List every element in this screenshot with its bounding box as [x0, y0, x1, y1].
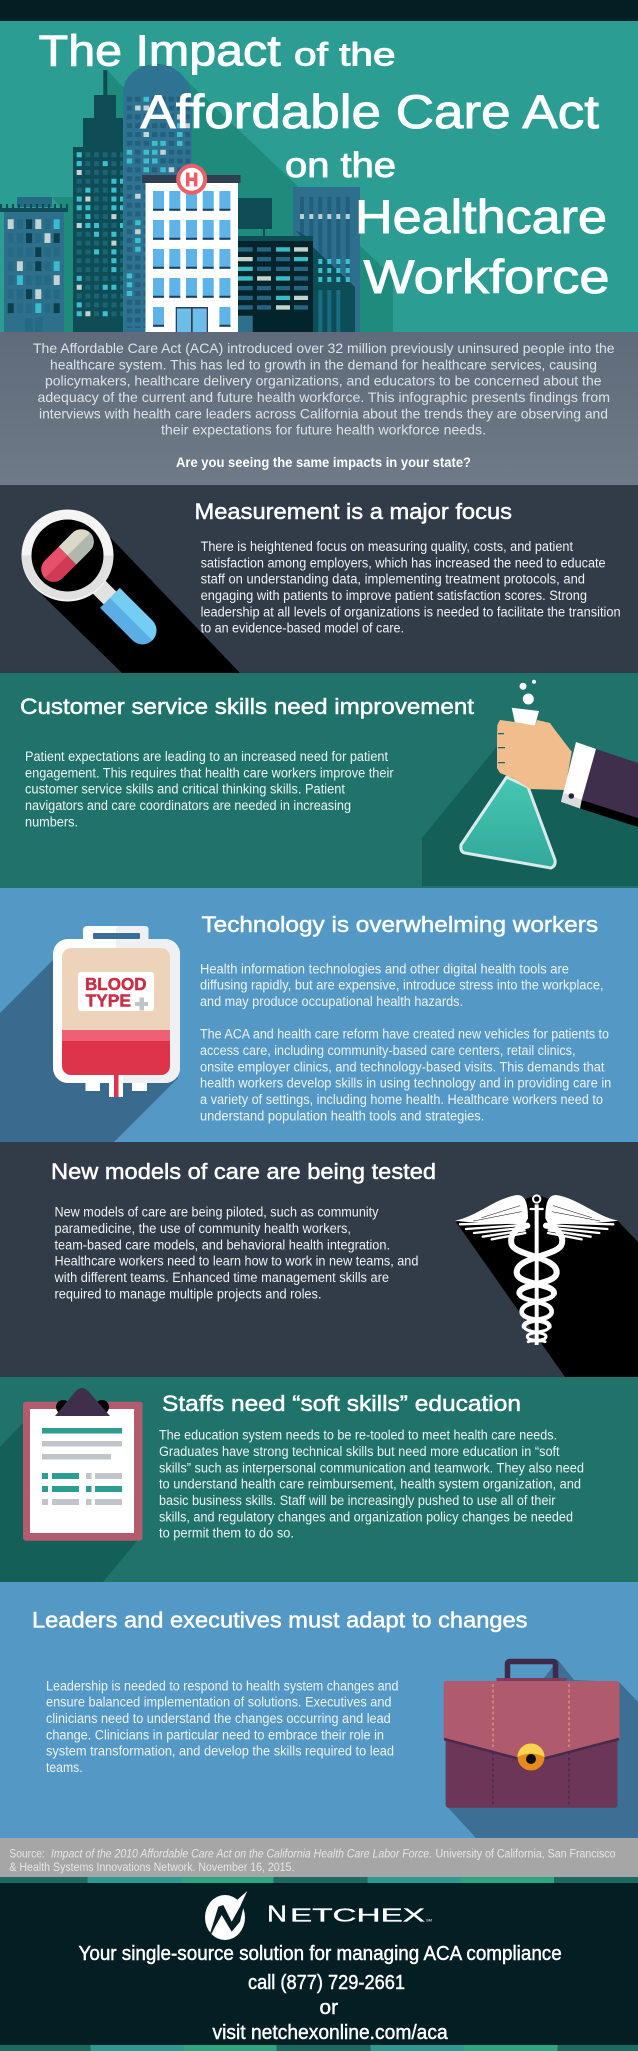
body text: ensure balanced implementation of solutions. Executives and [46, 1695, 392, 1710]
body text: skills, and regulatory changes and organization policy changes be needed [159, 1509, 573, 1524]
body text: system transformation, and develop the skills required to lead [46, 1744, 394, 1759]
source note: & Health Systems Innovations Network. November 16, 2015. [9, 1860, 294, 1874]
intro text: policymakers, healthcare delivery organizations, and educators to be concerned about the [45, 373, 602, 389]
icon: caduceus [455, 1195, 638, 1377]
blue tower [123, 64, 192, 332]
icon: blood bag [0, 926, 180, 1142]
panel: technology [0, 888, 638, 1142]
body text: Leadership is needed to respond to health system changes and [46, 1678, 398, 1693]
body text [159, 1428, 584, 1541]
city skyline illustration [0, 64, 393, 332]
panel: new models [0, 1142, 638, 1377]
body text [25, 749, 394, 829]
body text: The education system needs to be re-tooled to meet health care needs. [159, 1428, 557, 1443]
bag label: BLOOD [85, 974, 146, 994]
body text: and may produce occupational health hazards. [200, 994, 463, 1009]
title: of the [294, 37, 396, 73]
body text: The ACA and health care reform have created new vehicles for patients to [200, 1027, 609, 1042]
panel: intro [0, 332, 638, 485]
bag label: TYPE [86, 990, 131, 1010]
body text [200, 961, 611, 1123]
right tower [293, 187, 360, 332]
tagline: Your single-source solution for managing ACA compliance [78, 1943, 562, 1965]
body text: to an evidence-based model of care. [201, 621, 404, 636]
logo: Netchex: SM [426, 1918, 432, 1923]
body text: navigators and care coordinators are needed in increasing [25, 798, 351, 813]
body text: required to manage multiple projects and roles. [54, 1286, 322, 1301]
heading: Leaders and executives must adapt to changes [32, 1608, 528, 1633]
panel: customer service [0, 673, 638, 888]
body text: Patient expectations are leading to an increased need for patient [25, 749, 388, 764]
body text: engagement. This requires that health care workers improve their [25, 765, 394, 780]
body text: team-based care models, and behavioral health integration. [54, 1237, 390, 1252]
left building [0, 197, 68, 332]
top dark band [0, 0, 638, 21]
body text: onsite employer clinics, and technology-based visits. This demands that [200, 1059, 605, 1074]
body text: teams. [46, 1760, 83, 1775]
body text: to permit them to do so. [159, 1526, 294, 1541]
heading: Customer service skills need improvement [20, 694, 475, 719]
title: Healthcare [355, 190, 607, 243]
intro text: adequacy of the current and future health workforce. This infographic presents findings from [38, 389, 610, 405]
panel: leaders [0, 1582, 638, 1838]
body text [54, 1205, 418, 1301]
source note: Source: [9, 1846, 45, 1860]
source note: Impact of the 2010 Affordable Care Act on the California Health Care Labor Force. [51, 1846, 432, 1860]
title: The Impact [39, 27, 281, 76]
body text: Graduates have strong technical skills but need more education in “soft [159, 1444, 560, 1459]
hospital H sign [176, 164, 207, 195]
intro question: Are you seeing the same impacts in your state? [176, 454, 471, 470]
body text: health workers develop skills in using technology and in providing care in [200, 1076, 611, 1091]
panel: measurement [0, 485, 638, 673]
hospital door [176, 307, 208, 332]
website: visit netchexonline.com/aca [212, 2022, 449, 2044]
intro text: healthcare system. This has led to growth in the demand for healthcare services, causing [50, 356, 597, 372]
colour strip [0, 1877, 638, 1883]
body text: staff on understanding data, implementing treatment protocols, and [201, 572, 585, 587]
heading: New models of care are being tested [51, 1159, 436, 1184]
body text: with different teams. Enhanced time management skills are [54, 1270, 389, 1285]
body text: leadership at all levels of organizations is needed to facilitate the transition [201, 604, 621, 619]
bag label [78, 972, 154, 1011]
logo: Netchex: N [267, 1901, 287, 1927]
body text: numbers. [25, 814, 78, 829]
body text: clinicians need to understand the changes occurring and lead [46, 1711, 391, 1726]
intro text: interviews with health care leaders across California about the trends they are observing and [39, 405, 608, 421]
panel: header [0, 21, 638, 332]
panel: footer [0, 1883, 638, 2045]
icon: magnifying glass with pill [2, 490, 240, 673]
body text: New models of care are being piloted, such as community [54, 1205, 379, 1220]
title [39, 27, 609, 303]
icon: clipboard [0, 1388, 142, 1582]
body text [46, 1678, 398, 1775]
intro text: The Affordable Care Act (ACA) introduced over 32 million previously uninsured people into the [33, 340, 615, 356]
body text: paramedicine, the use of community health workers, [54, 1221, 351, 1236]
title: on the [285, 146, 396, 185]
title: Workforce [364, 250, 610, 303]
dark tower [73, 70, 123, 332]
body text [201, 539, 621, 636]
title: Affordable Care Act [140, 85, 599, 138]
body text: There is heightened focus on measuring quality, costs, and patient [201, 539, 573, 554]
briefcase clasp [518, 1744, 544, 1770]
or: or [320, 1997, 338, 2019]
billboard [238, 198, 272, 236]
intro text: their expectations for future health workforce needs. [161, 422, 486, 438]
logo: Netchex: ETCHEX [290, 1905, 425, 1926]
body text: access care, including community-based care centers, retail clinics, [200, 1043, 576, 1058]
source note [0, 1838, 638, 1877]
body text: understand population health tools and strategies. [200, 1108, 484, 1123]
heading: Measurement is a major focus [194, 499, 512, 524]
body text: customer service skills and critical thinking skills. Patient [25, 782, 345, 797]
hospital [142, 164, 240, 332]
panel: soft skills [0, 1377, 638, 1582]
body text: to understand health care reimbursement, health system organization, and [159, 1477, 581, 1492]
body text: diffusing rapidly, but are expensive, introduce stress into the workplace, [200, 978, 604, 993]
logo: Netchex [205, 1891, 432, 1942]
body text: a variety of settings, including home health. Healthcare workers need to [200, 1092, 603, 1107]
icon: hand holding flask [422, 680, 638, 886]
heading: Staffs need “soft skills” education [162, 1391, 521, 1416]
body text: engaging with patients to improve patient satisfaction scores. Strong [201, 588, 587, 603]
icon: briefcase [444, 1660, 638, 1838]
body text: change. Clinicians in particular need to embrace their role in [46, 1727, 384, 1742]
body text: Health information technologies and other digital health tools are [200, 961, 569, 976]
heading: Technology is overwhelming workers [202, 912, 598, 937]
body text: basic business skills. Staff will be increasingly pushed to use all of their [159, 1493, 556, 1508]
intro text [33, 340, 615, 438]
bottom colour strip [0, 2045, 638, 2051]
body text: Healthcare workers need to learn how to work in new teams, and [54, 1254, 418, 1269]
black building [238, 236, 313, 332]
body text: skills” such as interpersonal communication and teamwork. They also need [159, 1460, 584, 1475]
phone: call (877) 729-2661 [248, 1972, 405, 1994]
body text: satisfaction among employers, which has increased the need to educate [201, 555, 606, 570]
